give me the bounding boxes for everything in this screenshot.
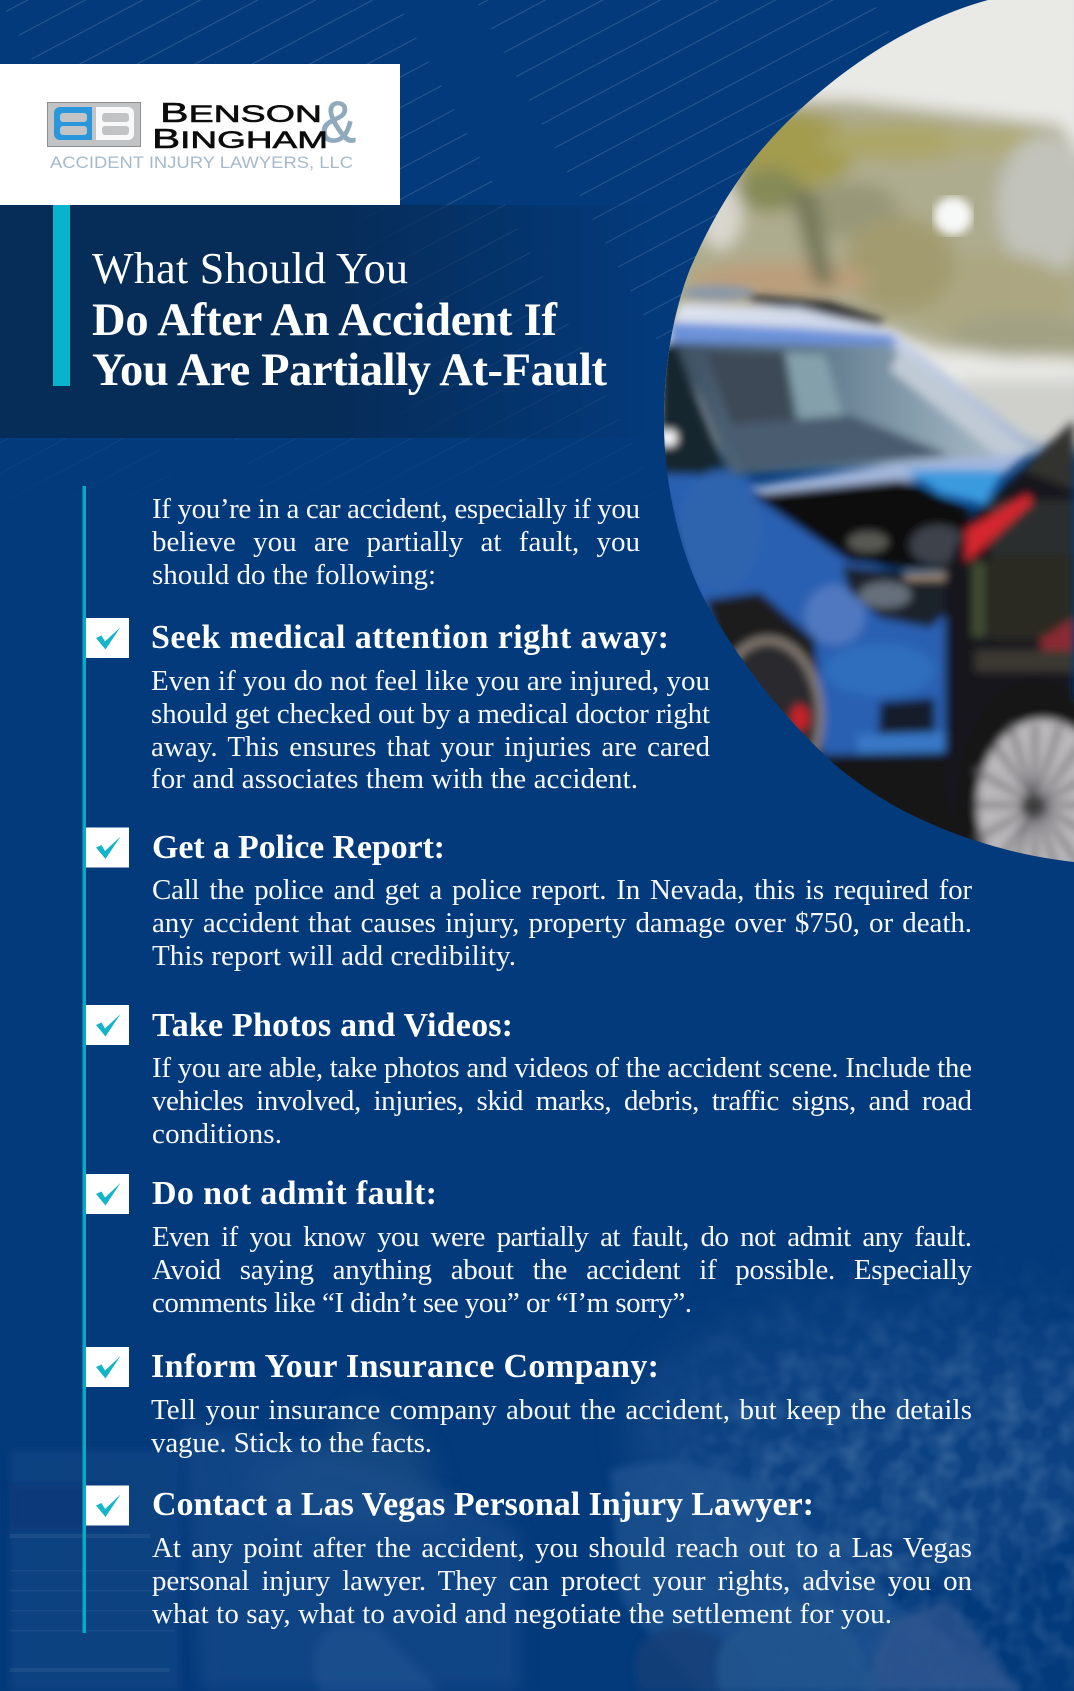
body text: vague. Stick to the facts. xyxy=(151,1427,432,1459)
icon: check box xyxy=(86,1486,129,1526)
background diagonal lines xyxy=(0,0,889,462)
body text: Even if you know you were partially at fault, do not admit any fault. xyxy=(152,1221,972,1253)
body text: away. This ensures that your injuries are cared xyxy=(151,731,710,763)
logo icon: BB monogram xyxy=(48,102,140,146)
title: Do After An Accident If xyxy=(92,295,558,346)
body text xyxy=(151,665,710,795)
title accent bar xyxy=(53,205,70,386)
black car xyxy=(945,420,1074,930)
heading: Get a Police Report: xyxy=(152,829,445,866)
body text xyxy=(152,1221,972,1319)
header band xyxy=(0,205,660,438)
title: You Are Partially At-Fault xyxy=(92,345,608,396)
checklist vertical line xyxy=(82,486,86,1633)
heading: Take Photos and Videos: xyxy=(152,1007,513,1044)
body text: comments like “I didn’t see you” or “I’m sorry”. xyxy=(152,1287,692,1319)
icon: check box xyxy=(86,828,129,868)
step: contact a lawyer xyxy=(86,1486,972,1630)
faded person xyxy=(180,1420,1020,1691)
icon: check box xyxy=(86,1174,129,1214)
icon: check box xyxy=(86,1005,129,1045)
icon: check box xyxy=(86,618,129,658)
body text xyxy=(151,1394,972,1459)
intro text: believe you are partially at fault, you xyxy=(152,526,640,558)
blue car xyxy=(660,285,1040,792)
body text: what to say, what to avoid and negotiate the settlement for you. xyxy=(152,1598,892,1630)
icon: check box xyxy=(86,1347,129,1387)
intro text: If you’re in a car accident, especially if you xyxy=(152,493,640,525)
body text: Even if you do not feel like you are injured, you xyxy=(151,665,710,697)
logo name: Bingham: B INGHAM xyxy=(152,123,328,154)
body text: should get checked out by a medical doctor right xyxy=(151,698,710,730)
step: photos and videos xyxy=(86,1005,972,1150)
sun glare spot xyxy=(934,197,972,235)
body text: conditions. xyxy=(152,1118,282,1150)
body text: If you are able, take photos and videos of the accident scene. Include the xyxy=(152,1052,972,1084)
body text: This report will add credibility. xyxy=(152,940,516,972)
title: What Should You xyxy=(92,244,408,293)
step: do not admit fault xyxy=(86,1174,972,1319)
body text: Call the police and get a police report. In Nevada, this is required for xyxy=(152,874,972,906)
intro text xyxy=(152,493,640,591)
sky and trees xyxy=(640,0,1074,450)
body text xyxy=(152,1052,972,1150)
cars xyxy=(664,281,1074,862)
heading: Seek medical attention right away: xyxy=(151,619,669,656)
body text: any accident that causes injury, property damage over $750, or death. xyxy=(152,907,972,939)
body text: for and associates them with the accident. xyxy=(151,763,638,795)
faded truck xyxy=(10,1450,180,1691)
step: police report xyxy=(86,828,972,972)
photo: crashed cars in oval xyxy=(664,0,1074,862)
heading: Do not admit fault: xyxy=(152,1175,437,1212)
body text: vehicles involved, injuries, skid marks, debris, traffic signs, and road xyxy=(152,1085,972,1117)
body text xyxy=(152,1532,972,1630)
heading: Contact a Las Vegas Personal Injury Lawyer: xyxy=(152,1486,814,1523)
logo tagline: ACCIDENT INJURY LAWYERS, LLC xyxy=(50,153,353,172)
faded background photo xyxy=(10,1290,1074,1691)
title xyxy=(92,244,608,396)
body text: Tell your insurance company about the accident, but keep the details xyxy=(151,1394,972,1426)
step: inform insurance xyxy=(86,1347,972,1459)
heading: Inform Your Insurance Company: xyxy=(151,1348,659,1385)
body text: personal injury lawyer. They can protect your rights, advise you on xyxy=(152,1565,972,1597)
body text: Avoid saying anything about the accident if possible. Especially xyxy=(152,1254,972,1286)
ground xyxy=(822,747,962,836)
logo panel xyxy=(0,64,400,205)
faded trees xyxy=(314,1290,1074,1691)
body text: At any point after the accident, you should reach out to a Las Vegas xyxy=(152,1532,972,1564)
logo ampersand: & xyxy=(320,90,356,155)
logo name: Benson: B ENSON xyxy=(160,97,322,128)
body text xyxy=(152,874,972,972)
intro text: should do the following: xyxy=(152,559,436,591)
step: seek medical attention xyxy=(86,618,710,795)
